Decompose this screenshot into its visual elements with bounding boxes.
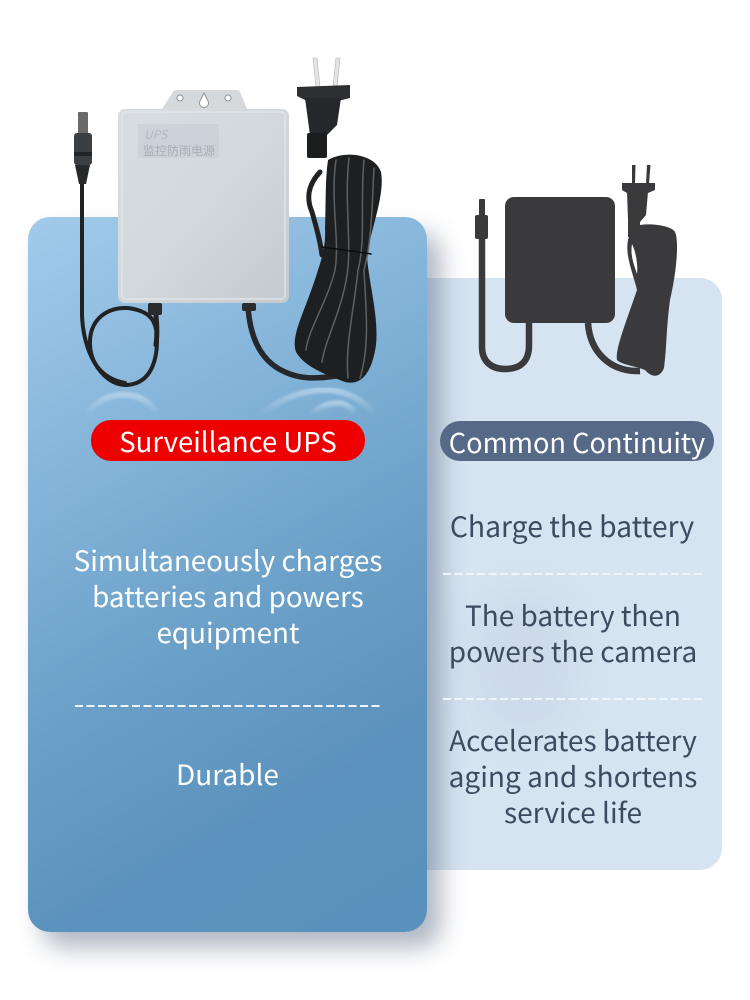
- badge: Surveillance UPS: Surveillance UPS: [119, 420, 337, 460]
- reflection: cable loops: [88, 390, 372, 414]
- text: charges and powers: equipment: [157, 612, 299, 652]
- silhouette plug and coil: [617, 165, 677, 376]
- adapter label: [138, 124, 219, 159]
- text: charge the battery: Charge the battery: [450, 505, 694, 546]
- text: aging: [449, 720, 697, 832]
- adapter label: UPS: [144, 126, 169, 143]
- adapter label: 监控防雨电源: [143, 142, 215, 159]
- text: aging: aging and shortens: [449, 756, 697, 796]
- text: aging: Accelerates battery: [449, 720, 697, 760]
- silhouette cables: [482, 236, 640, 371]
- connector: DC barrel plug: [74, 112, 92, 184]
- mains plug: [297, 58, 350, 158]
- adapter edge highlight: [122, 112, 285, 299]
- text: charges and powers: Simultaneously charges: [74, 540, 382, 580]
- mounting holes: [177, 93, 231, 108]
- silhouette body: [505, 197, 615, 323]
- text: charges and powers: [74, 540, 382, 652]
- adapter body: [118, 109, 289, 303]
- connector: cable gland left: [148, 303, 162, 315]
- panel: common continuity: [400, 278, 722, 870]
- text: battery powers camera: [449, 595, 697, 671]
- cable: power lead: [248, 306, 336, 378]
- mounting tab: [162, 90, 247, 109]
- text: battery powers camera: The battery then: [465, 595, 681, 635]
- text: charges and powers: batteries and powers: [92, 576, 364, 616]
- badge: Common Continuity: Common Continuity: [449, 421, 705, 461]
- text: aging: service life: [504, 792, 642, 832]
- panel: surveillance UPS: [28, 217, 427, 932]
- cable: coiled mains cord: [295, 155, 382, 383]
- silhouette barrel plug: [475, 199, 488, 239]
- text: durable: Durable: [176, 754, 279, 794]
- cable: DC lead with loop: [82, 183, 157, 385]
- connector: cable gland right: [242, 303, 256, 311]
- text: battery powers camera: powers the camera: [449, 631, 697, 671]
